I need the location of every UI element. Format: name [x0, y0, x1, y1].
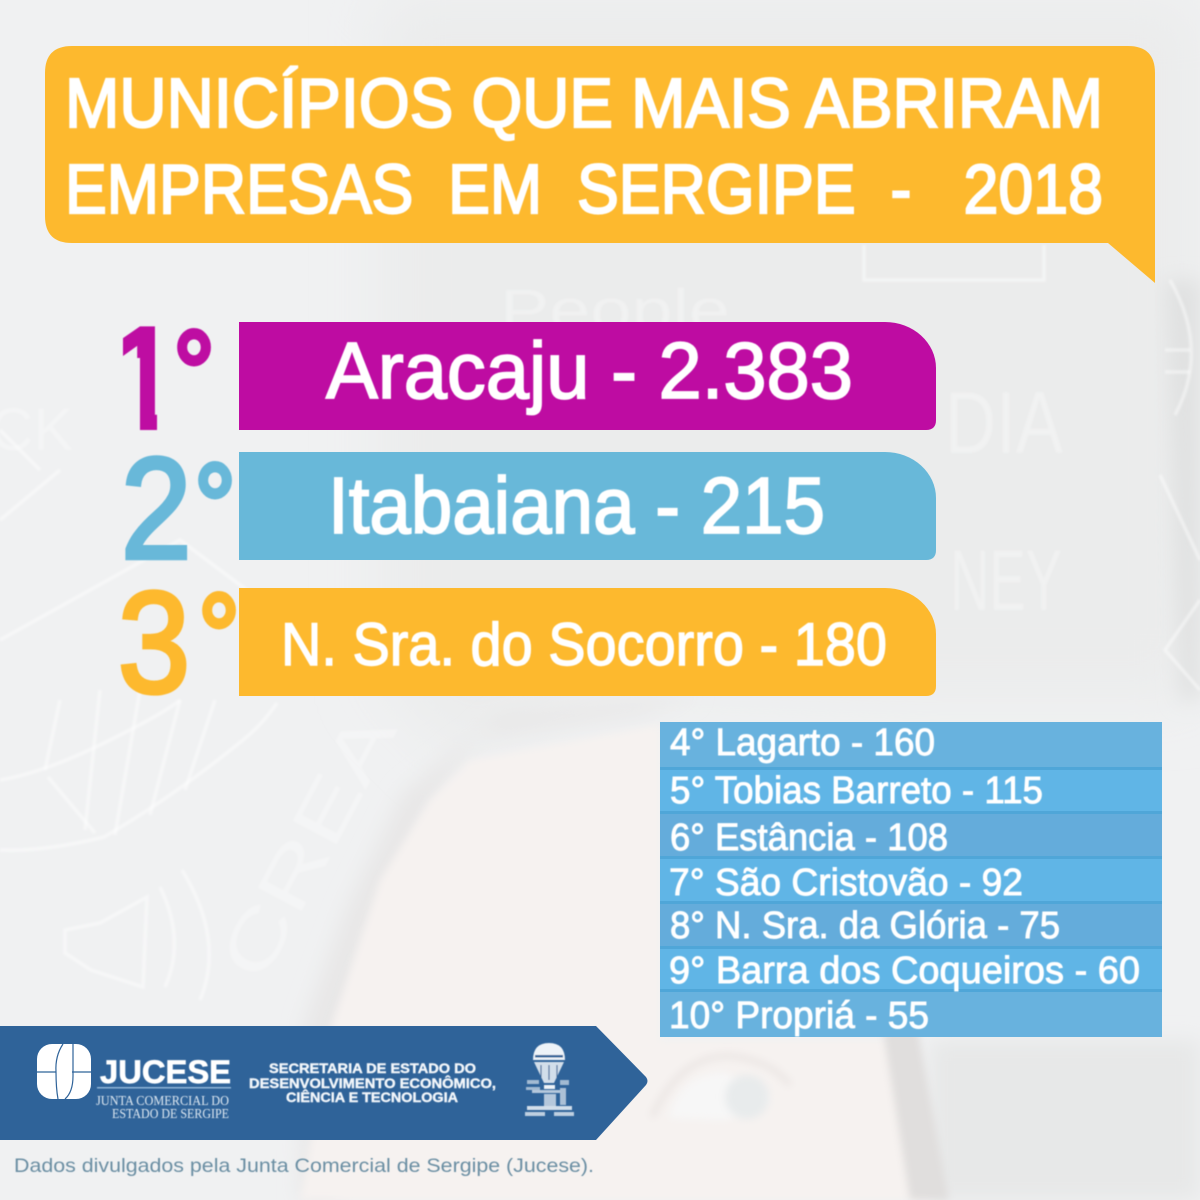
rank 2 row: Itabaiana: Itabaiana - 215: [328, 461, 825, 550]
list entries: 7° São Cristovão - 92: [669, 862, 1023, 904]
background photo: blurred face and chalk doodles: People: [500, 278, 730, 343]
background photo: blurred face and chalk doodles: DIA: [945, 373, 1063, 472]
JUCESE wordmark: JUCESE: [100, 1054, 231, 1090]
rank 1 numeral: [122, 326, 212, 431]
list entries: 4° Lagarto - 160: [670, 722, 935, 764]
list entries: 5° Tobias Barreto - 115: [670, 770, 1043, 812]
JUCESE wordmark: ESTADO DE SERGIPE: [112, 1107, 229, 1122]
footer banner with logos: [0, 1026, 648, 1140]
secretaria text: SECRETARIA DE ESTADO DO: [269, 1061, 476, 1076]
rank 2 numeral: [121, 427, 235, 589]
list entries: [669, 722, 1140, 1037]
secretaria text: DESENVOLVIMENTO ECONÔMICO,: [249, 1076, 496, 1091]
JUCESE wordmark: JUNTA COMERCIAL DO: [96, 1094, 229, 1109]
title speech bubble: [45, 46, 1155, 283]
icon: JUCESE logo mark: [37, 1044, 91, 1099]
list entries: 6° Estância - 108: [670, 817, 948, 859]
rank 3 row: N. Sra. do Socorro: [118, 563, 936, 724]
rank 1 row: Aracaju: [122, 322, 936, 431]
rank 1 numeral: 1: [104, 298, 184, 459]
rank 2 row: Itabaiana: [121, 427, 936, 589]
rank 1 row: Aracaju: Aracaju - 2.383: [326, 326, 853, 415]
list entries: 9° Barra dos Coqueiros - 60: [669, 950, 1140, 992]
rank 2 numeral: °: [195, 438, 235, 567]
background photo: blurred face and chalk doodles: CREA: [205, 699, 412, 993]
title text: [65, 64, 1103, 228]
secretaria text: CIÊNCIA E TECNOLOGIA: [286, 1090, 458, 1105]
JUCESE wordmark: [96, 1054, 231, 1122]
icon: state coat of arms with balloon: [525, 1043, 574, 1116]
title text: EMPRESAS EM SERGIPE - 2018: [65, 150, 1103, 228]
rank 3 row: N. Sra. do Socorro: N. Sra. do Socorro - 180: [281, 611, 887, 678]
rank 2 numeral: 2: [121, 427, 191, 589]
source note: Dados divulgados pela Junta Comercial de Sergipe (Jucese).: [14, 1155, 594, 1177]
ranking list 4 to 10: [660, 722, 1162, 1037]
background photo: blurred face and chalk doodles: NEY: [950, 533, 1062, 629]
list entries: 8° N. Sra. da Glória - 75: [670, 905, 1060, 947]
title text: MUNICÍPIOS QUE MAIS ABRIRAM: [65, 64, 1103, 142]
rank 3 numeral: [118, 563, 239, 724]
list entries: 10° Propriá - 55: [669, 995, 929, 1037]
rank 3 numeral: °: [199, 568, 239, 697]
rank 1 numeral: °: [174, 305, 214, 434]
secretaria text: [249, 1061, 496, 1105]
rank 3 numeral: 3: [118, 563, 190, 724]
